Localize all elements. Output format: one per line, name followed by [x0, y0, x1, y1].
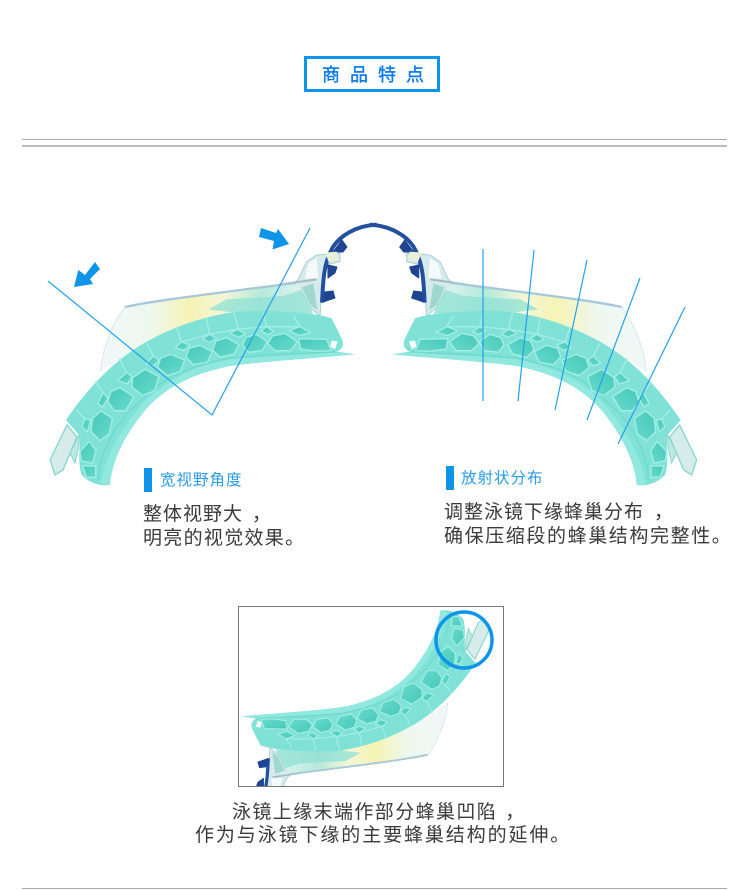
title box: 商品特点: 商品特点 [322, 65, 434, 85]
caption: 作为与泳镜下缘的主要蜂巢结构的延伸。 [195, 824, 571, 846]
panel: wide field of view [48, 225, 377, 549]
goggle detail [242, 610, 489, 786]
arrow: right [259, 228, 289, 250]
title box: 商品特点 [306, 58, 438, 90]
angle lines [48, 228, 310, 415]
left goggle image [50, 225, 377, 485]
description: 明亮的视觉效果。 [143, 527, 305, 549]
panel: radial distribution [370, 225, 732, 547]
frame [238, 606, 504, 786]
footer divider [22, 888, 727, 889]
label: 放射状分布: 放射状分布 [461, 469, 544, 487]
caption [195, 801, 571, 846]
description: 确保压缩段的蜂巢结构完整性。 [444, 525, 732, 547]
label marker [144, 468, 152, 492]
right goggle image [370, 225, 697, 485]
description: 调整泳镜下缘蜂巢分布 ， [444, 502, 674, 523]
caption: 泳镜上缘末端作部分蜂巢凹陷 ， [232, 801, 526, 823]
header divider lines [22, 139, 727, 147]
label: 宽视野角度: 宽视野角度 [160, 471, 243, 489]
radial lines [483, 249, 685, 444]
highlight circle [436, 612, 492, 668]
description: 整体视野大 ， [143, 504, 272, 525]
arrow: down-left [74, 262, 100, 287]
label marker [446, 466, 454, 490]
panel: framed detail image [238, 606, 504, 787]
